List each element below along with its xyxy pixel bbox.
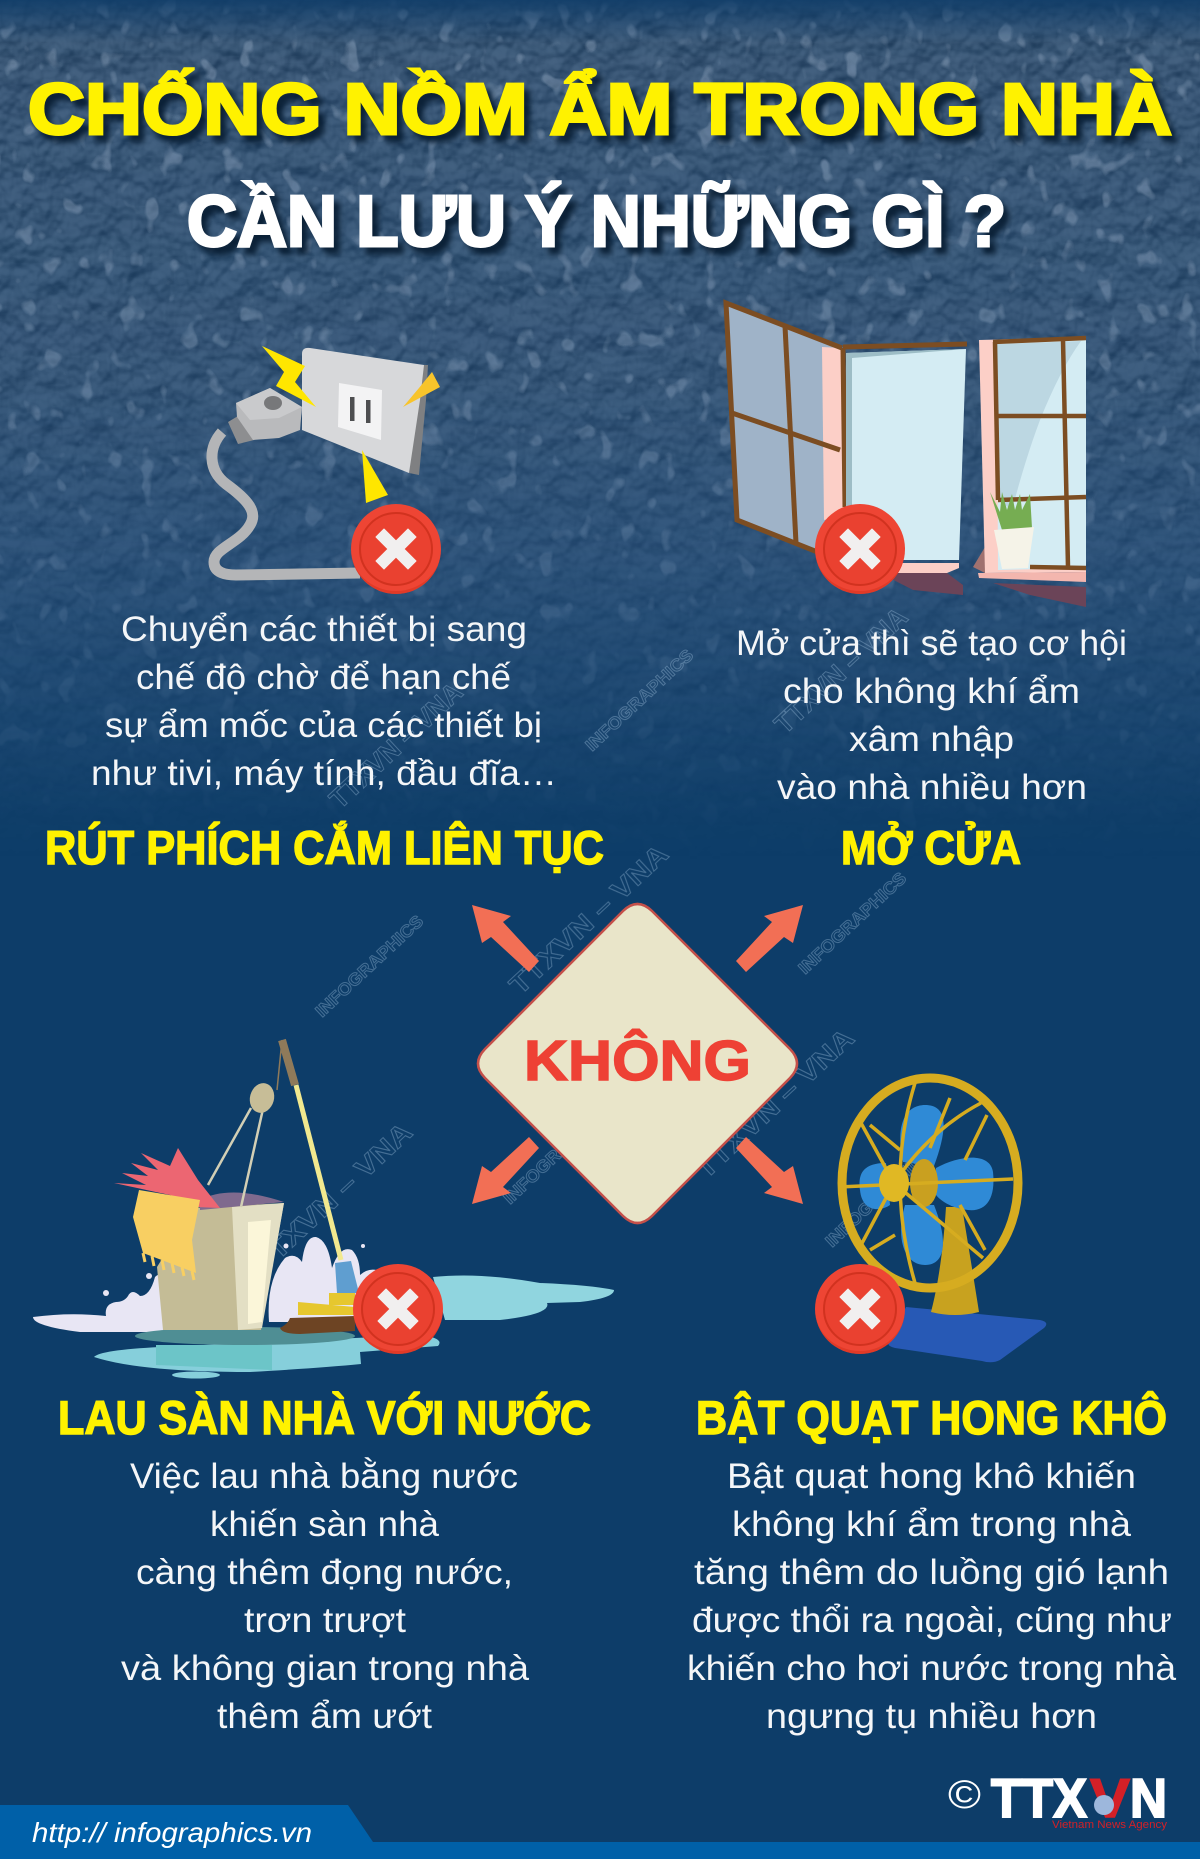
text block: window description: cho không khí ẩm (783, 672, 1080, 711)
watermarks: TTXVN – VNA (504, 839, 674, 1000)
centre diamond (478, 904, 797, 1223)
diamond label: KHÔNG (524, 1028, 751, 1093)
title (28, 68, 1172, 262)
logo: TTXVN: TTX (991, 1767, 1087, 1829)
text block: mopping description: Việc lau nhà bằng nước (130, 1457, 518, 1496)
text block: mopping description: trơn trượt (244, 1601, 406, 1640)
website url: http:// infographics.vn (32, 1817, 312, 1848)
logo: TTXVN: N (1130, 1767, 1167, 1829)
watermarks: INFOGRAPHICS (582, 646, 697, 755)
text block: fan description: được thổi ra ngoài, cũng như (692, 1601, 1172, 1640)
icon: x badge bucket (353, 1264, 443, 1354)
icon: x badge fan (815, 1264, 905, 1354)
watermarks: INFOGRAPHICS (795, 869, 910, 978)
text block: window description: vào nhà nhiều hơn (777, 768, 1087, 807)
watermarks: INFOGRAPHICS (312, 912, 427, 1021)
text block: window description: xâm nhập (849, 720, 1014, 759)
text block: plug description: chế độ chờ để hạn chế (136, 658, 511, 697)
text block: fan description: Bật quạt hong khô khiến (727, 1457, 1136, 1496)
text block: fan description: khiến cho hơi nước trong nhà (687, 1649, 1177, 1688)
footer bar (0, 1805, 1200, 1859)
icon: bucket and mop (33, 1040, 614, 1378)
text block: fan description: không khí ẩm trong nhà (732, 1505, 1132, 1544)
logo: TTXVN: © (948, 1773, 981, 1817)
text block: plug description (91, 610, 557, 793)
title line 2: CẦN LƯU Ý NHỮNG GÌ ? (187, 181, 1006, 262)
icon: fan (839, 1078, 1046, 1362)
text block: mopping description (121, 1457, 530, 1736)
heading: mopping: LAU SÀN NHÀ VỚI NƯỚC (58, 1391, 591, 1444)
text block: fan description: tăng thêm do luồng gió lạnh (694, 1553, 1169, 1592)
heading: plug: RÚT PHÍCH CẮM LIÊN TỤC (45, 821, 604, 874)
text block: plug description: sự ẩm mốc của các thiết bị (105, 706, 542, 745)
watermarks: TTXVN – VNA (690, 1023, 860, 1184)
text block: window description (736, 624, 1127, 807)
watermarks (248, 602, 937, 1278)
text block: mopping description: khiến sàn nhà (210, 1505, 440, 1544)
watermarks: INFOGRAPHICS (822, 1142, 937, 1251)
text block: mopping description: và không gian trong nhà (121, 1649, 530, 1688)
background (0, 0, 1200, 802)
icon: plug and socket (212, 346, 440, 575)
title line 1: CHỐNG NỒM ẨM TRONG NHÀ (28, 68, 1172, 150)
arrows (472, 905, 803, 1204)
icon: x badge plug (351, 504, 441, 594)
text block: plug description: như tivi, máy tính, đầu đĩa… (91, 754, 557, 793)
watermarks: TTXVN – VNA (324, 677, 468, 814)
text block: fan description (687, 1457, 1177, 1736)
text block: fan description: ngưng tụ nhiều hơn (766, 1697, 1097, 1736)
text block: window description: Mở cửa thì sẽ tạo cơ hội (736, 624, 1127, 663)
text block: mopping description: càng thêm đọng nước, (136, 1553, 513, 1592)
icon: open window (726, 303, 1086, 607)
watermarks: INFOGRAPHICS (500, 1099, 615, 1208)
logo: TTXVN (948, 1767, 1168, 1831)
heading: fan: BẬT QUẠT HONG KHÔ (696, 1391, 1167, 1444)
watermarks: TTXVN – VNA (248, 1117, 418, 1278)
watermarks: TTXVN – VNA (769, 602, 913, 739)
icon: x badge window (815, 504, 905, 594)
heading: window: MỞ CỬA (841, 821, 1021, 874)
logo: TTXVN: Vietnam News Agency (1052, 1819, 1168, 1831)
text block: plug description: Chuyển các thiết bị sang (121, 610, 527, 649)
plant in pot (990, 492, 1034, 569)
text block: mopping description: thêm ẩm ướt (217, 1697, 432, 1736)
logo: TTXVN: V (1090, 1767, 1130, 1829)
